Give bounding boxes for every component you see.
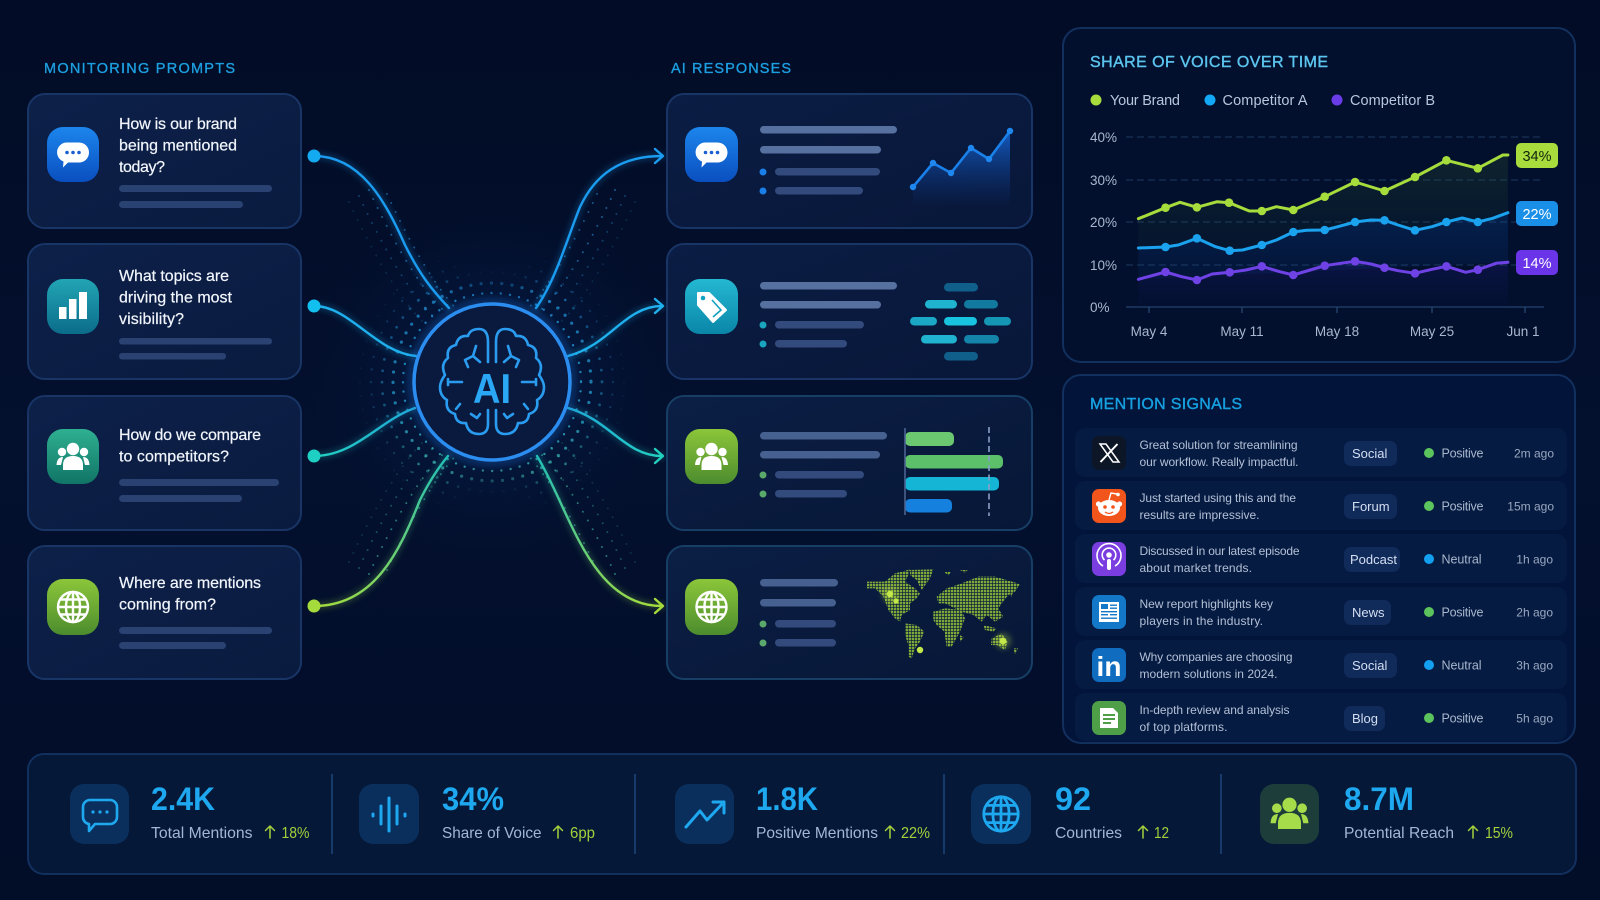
icon: trend arrow [675,784,734,844]
placeholder lines [119,479,279,502]
prompt text: to competitors? [119,448,229,466]
panel: prompt card 4 [28,546,301,679]
value badge: your brand [1516,143,1558,168]
icon: waveform [359,784,419,844]
delta: 15% [1485,825,1513,842]
signal row: Blog: of top platforms. [1140,720,1228,734]
delta: 22% [901,825,930,842]
signal row: Reddit: 15m ago [1507,500,1554,514]
value badge: competitor B [1516,250,1558,275]
x axis labels: May 11 [1220,324,1264,339]
signal row: Reddit: results are impressive. [1140,508,1260,522]
icon: globe [47,579,99,635]
icon: X [1092,436,1126,470]
signal row: LinkedIn: Social [1352,658,1388,673]
y axis and gridlines: 10% [1090,258,1117,273]
placeholder lines [119,627,272,649]
topic tag cloud [910,283,1011,360]
prompt text: today? [119,159,165,176]
signal row: Blog: Blog [1352,711,1378,726]
icon: brain [440,329,544,434]
area fills [1138,155,1508,307]
prompt text: being mentioned [119,138,237,154]
x axis labels: Jun 1 [1506,324,1540,339]
KPI: countries: 92 [1055,781,1091,817]
icon: chat [685,127,738,182]
signal row: News: Positive [1442,606,1484,620]
delta [266,825,310,842]
signal row: Podcast: about market trends. [1140,561,1252,575]
panel: prompt card 3 [28,396,301,530]
signal row: X: 2m ago [1514,446,1554,460]
signal row: Podcast [1075,534,1567,583]
central AI hub [407,297,577,467]
signal row: News [1075,587,1567,636]
prompt text: visibility? [119,311,184,328]
prompt text: coming from? [119,596,216,614]
icon: people [1260,784,1319,844]
map hotspots [882,586,1011,653]
heading: monitoring prompts: MONITORING PROMPTS [44,61,235,77]
connector arrows: hub to responses [536,149,663,613]
line: competitor B [1138,257,1508,284]
panel: KPI strip [28,754,1576,874]
dotted world map [867,569,1020,658]
sparkline chart [910,128,1013,207]
signal row: Podcast: Neutral [1442,552,1482,566]
KPI: total mentions: Total Mentions [151,825,252,842]
signal row: Blog [1075,693,1567,741]
delta [1468,825,1513,842]
placeholder lines [119,338,272,360]
value badge: competitor A: 22% [1522,207,1552,223]
KPI: total mentions: 2.4K [151,781,215,817]
signal row: Reddit: Just started using this and the [1140,491,1296,505]
signal row: LinkedIn: modern solutions in 2024. [1140,667,1278,681]
signal row: X: Positive [1442,446,1484,460]
value badge: your brand: 34% [1522,149,1552,165]
icon: podcast [1092,542,1126,576]
icon: chat outline [70,784,129,844]
KPI: countries: Countries [1055,825,1122,842]
KPI: share of voice: 34% [442,781,504,817]
summary lines [760,282,897,348]
x axis labels [1131,324,1540,339]
prompt text: How is our brand [119,116,237,133]
signal row: LinkedIn: Why companies are choosing [1140,650,1292,664]
summary lines [760,432,887,498]
signal row: News: 2h ago [1516,606,1553,620]
signal row: News: New report highlights key [1140,597,1273,611]
signal row: Blog: 5h ago [1516,712,1553,726]
summary lines [760,126,897,194]
panel: response card 1 [667,94,1032,228]
delta [886,825,930,842]
panel: mention signals [1063,375,1575,743]
icon: bars [47,279,99,334]
chart legend: Competitor A [1222,93,1308,109]
prompt text: driving the most [119,290,233,306]
icon: people [47,429,99,484]
signal row: LinkedIn: Neutral [1442,658,1482,672]
signal row: Reddit [1075,481,1567,530]
KPI: total mentions [70,781,310,844]
signal row: Reddit: Positive [1442,500,1484,514]
prompt text: How do we compare [119,427,261,444]
chart legend: Competitor B [1350,93,1435,109]
panel: prompt card 2 [28,244,301,379]
signal row: LinkedIn: 3h ago [1516,658,1553,672]
KPI: potential reach [1260,781,1513,844]
panel: share of voice chart [1063,28,1575,362]
KPI: positive mentions: Positive Mentions [756,825,878,842]
placeholder lines [119,185,272,208]
signal row: Podcast: Podcast [1350,552,1397,567]
x axis labels: May 18 [1315,324,1359,339]
KPI: share of voice: Share of Voice [442,825,542,842]
chart title: SHARE OF VOICE OVER TIME [1090,54,1328,71]
signal row: Blog: Positive [1442,712,1484,726]
signal row: X [1075,428,1567,477]
prompt text: Where are mentions [119,575,261,592]
line: your brand [1138,155,1508,219]
KPI: share of voice [359,781,595,844]
panel: response card 3 [667,396,1032,530]
KPI: positive mentions [675,781,930,844]
y axis and gridlines: 40% [1090,130,1117,145]
connector curves: prompts to hub [308,150,449,612]
signal row: Reddit: Forum [1352,499,1390,514]
signal row: X: Social [1352,446,1388,461]
hub label: AI [473,365,511,412]
panel: prompt card 1 [28,94,301,228]
icon: globe [971,784,1031,844]
icon: news [1092,595,1126,629]
icon: Reddit [1092,489,1126,523]
signal row: Podcast: 1h ago [1516,552,1553,566]
signal row: News: News [1352,605,1385,620]
chart legend: Your Brand [1110,93,1180,109]
icon: globe [685,579,738,635]
summary lines [760,579,838,646]
y axis and gridlines: 30% [1090,173,1117,188]
delta [554,825,595,842]
icon: blog [1092,701,1126,735]
line: competitor A [1138,213,1508,255]
y axis and gridlines [1090,130,1544,315]
KPI: potential reach: 8.7M [1344,781,1414,817]
signal row: X: Great solution for streamlining [1140,438,1298,452]
x axis labels: May 4 [1131,324,1168,339]
chart legend [1090,93,1435,109]
delta: 12 [1154,825,1169,842]
signal row: LinkedIn [1075,640,1567,689]
competitor bar chart [905,427,1003,516]
dot field around hub [349,190,635,574]
KPI: positive mentions: 1.8K [756,781,818,817]
panel: response card 2 [667,244,1032,379]
connector start dots [308,150,320,612]
prompt text: What topics are [119,268,229,285]
panel title: MENTION SIGNALS [1090,396,1242,413]
value badge: competitor B: 14% [1522,256,1552,272]
KPI: countries [971,781,1169,844]
delta [1138,825,1169,842]
signal row: X: our workflow. Really impactful. [1140,455,1298,469]
delta: 18% [282,825,310,842]
signal row: News: players in the industry. [1140,614,1263,628]
icon: tag [685,279,738,334]
y axis and gridlines: 20% [1090,215,1117,230]
value badge: competitor A [1516,201,1558,226]
icon: LinkedIn [1092,648,1126,682]
icon: people [685,429,738,484]
y axis and gridlines: 0% [1090,300,1110,315]
signal row: Blog: In-depth review and analysis [1140,703,1290,717]
signal row: Podcast: Discussed in our latest episode [1140,544,1300,558]
x axis labels: May 25 [1410,324,1454,339]
heading: AI responses: AI RESPONSES [671,61,791,77]
icon: LinkedIn: in [1097,651,1121,682]
icon: chat [47,127,99,182]
delta: 6pp [570,825,595,842]
panel: response card 4 [667,546,1032,679]
KPI: potential reach: Potential Reach [1344,825,1454,842]
